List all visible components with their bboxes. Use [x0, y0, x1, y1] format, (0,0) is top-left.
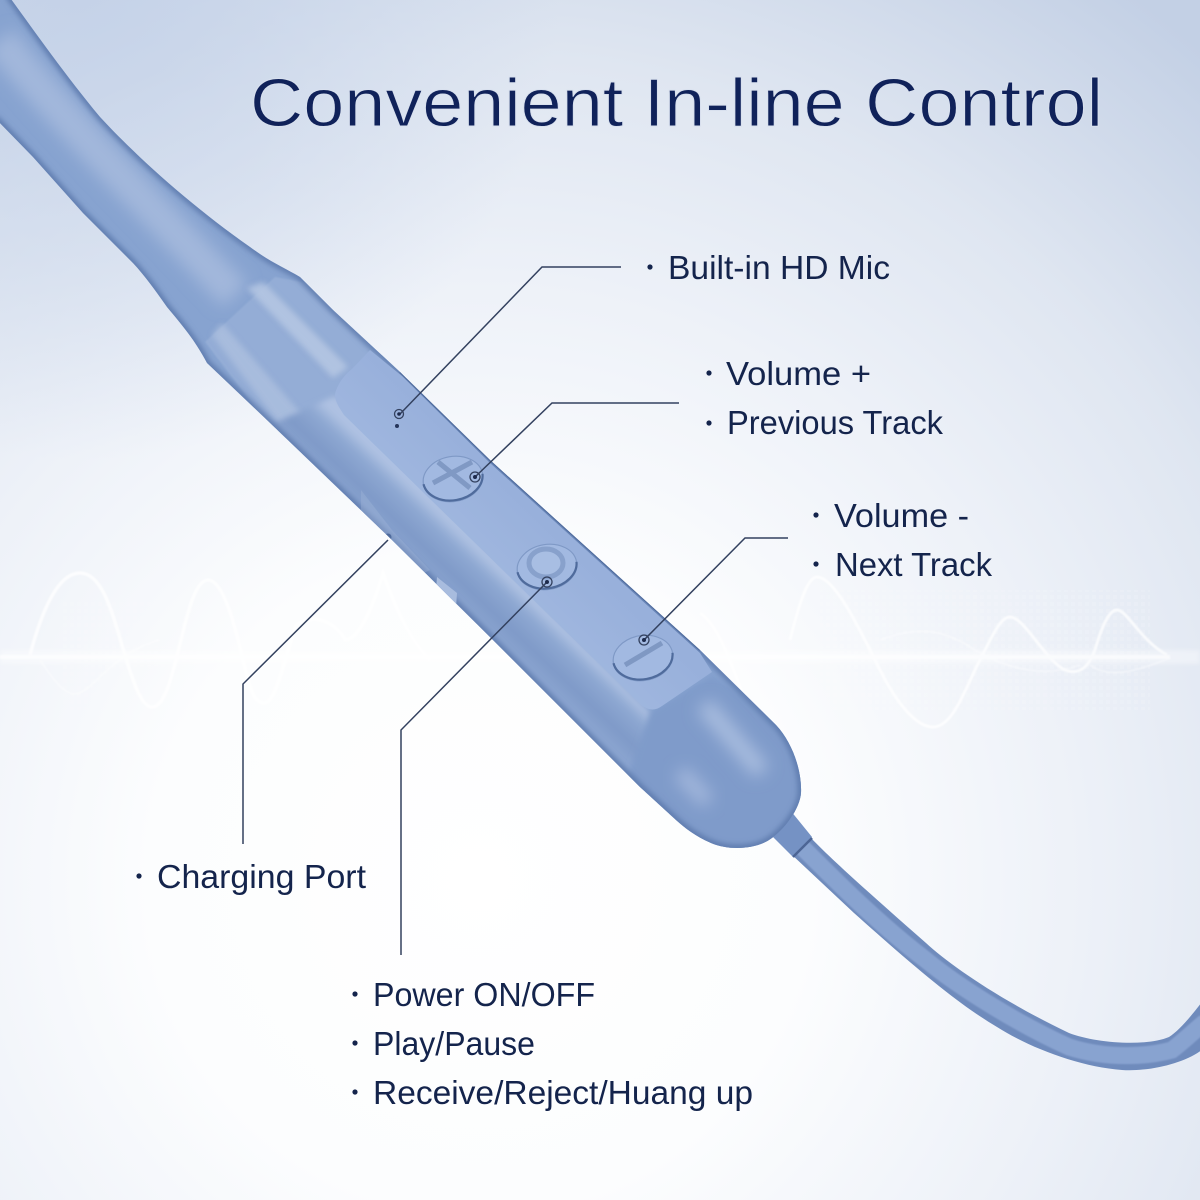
leader line: volume up: [470, 403, 679, 482]
charging port cover: [361, 490, 430, 575]
mic hole: [395, 424, 399, 428]
tip section: [630, 685, 802, 848]
label: volume up and previous track: [706, 355, 943, 441]
title: Convenient In-line Control: [250, 65, 1103, 141]
leader line: built-in mic: [394, 267, 621, 418]
label: built-in HD mic: Built-in HD Mic: [668, 249, 890, 286]
label: power, play and call functions: Power ON/OFF: [373, 976, 595, 1013]
button plate: [335, 350, 712, 709]
top rim line: [400, 372, 700, 650]
label: volume down and next track: Volume -: [834, 497, 969, 534]
label: volume up and previous track: Previous Track: [727, 404, 943, 441]
label: power, play and call functions: [352, 976, 753, 1111]
lower body shading: [270, 396, 660, 800]
leader line: charging port: [243, 540, 388, 844]
label: volume down and next track: [813, 497, 992, 583]
collar section: [205, 277, 420, 440]
label: charging port: Charging Port: [157, 858, 366, 895]
label: volume down and next track: Next Track: [835, 546, 992, 583]
neckband and inline control body: [0, 0, 820, 870]
collar highlights: [247, 282, 348, 378]
sound wave graphic: [0, 573, 1200, 727]
plus button: [422, 456, 484, 502]
power button: [516, 544, 578, 590]
label: volume up and previous track: Volume +: [726, 355, 871, 392]
earphone cable: [790, 836, 1200, 1070]
leader line: volume down: [639, 538, 788, 645]
strain relief: [762, 805, 812, 857]
label: power, play and call functions: Play/Pause: [373, 1025, 535, 1062]
neck highlight: [0, 40, 235, 295]
edge shading: [0, 0, 801, 848]
base shell: [0, 0, 820, 870]
label: power, play and call functions: Receive/Reject/Huang up: [373, 1074, 753, 1111]
minus button: [612, 634, 674, 682]
leader line: power button: [401, 577, 552, 955]
